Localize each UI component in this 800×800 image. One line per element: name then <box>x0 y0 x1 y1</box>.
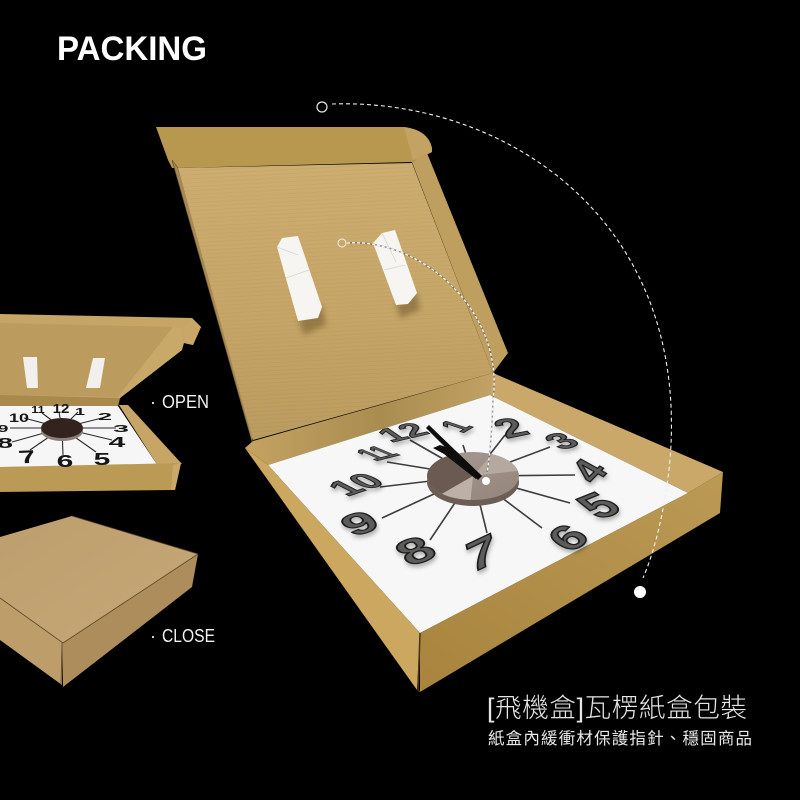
clock spokes <box>380 435 575 540</box>
box lid: inner panel <box>178 163 493 440</box>
small clock: 10 <box>9 412 29 425</box>
close label: CLOSE <box>162 626 215 646</box>
clock numerals: 3 <box>535 427 589 454</box>
clock numerals: 5 <box>565 485 633 526</box>
clock hub <box>427 452 519 506</box>
small lid <box>0 314 201 406</box>
box front wall <box>420 472 723 692</box>
clock <box>330 418 622 576</box>
white corrugated liner <box>268 395 688 633</box>
closed box edges <box>0 516 198 685</box>
clock numerals: 11 <box>348 443 408 464</box>
heading: corrugated box packaging: [飛機盒]瓦楞紙盒包裝 <box>487 693 747 723</box>
box left wall <box>245 448 420 690</box>
close label: · <box>150 626 156 646</box>
small clock: 4 <box>109 434 126 451</box>
small open-box view <box>0 314 201 492</box>
open box photo <box>156 127 723 692</box>
small foam blocks <box>23 357 105 388</box>
small clock: 2 <box>98 411 112 423</box>
closed box top <box>0 516 198 643</box>
small clock: 7 <box>17 447 38 468</box>
small clock: 1 <box>75 406 85 418</box>
closed box view <box>0 516 198 687</box>
small clock: 6 <box>57 452 73 471</box>
small clock: 12 <box>53 401 70 416</box>
clock numerals: 12 <box>370 419 437 447</box>
small clock: 11 <box>31 404 45 416</box>
dashed leader: foam to clock <box>338 239 494 485</box>
open label: OPEN <box>162 392 209 412</box>
box lid: top flap <box>156 127 432 168</box>
lid hinge strip <box>245 373 493 465</box>
box lid: right flap <box>412 153 508 373</box>
clock numerals: 9 <box>332 504 389 543</box>
clock hands <box>426 425 482 480</box>
clock numerals: 1 <box>431 416 482 436</box>
clock numerals: 8 <box>385 528 446 573</box>
small clock <box>0 401 129 471</box>
box lid: left flap <box>172 160 254 442</box>
closed box left wall <box>0 598 63 685</box>
clock numerals: 4 <box>562 452 618 490</box>
foam block: right <box>373 230 417 305</box>
clock numerals: 7 <box>462 524 501 583</box>
box corner edge <box>418 633 420 692</box>
small clock: 3 <box>113 423 129 434</box>
foam block shadows <box>298 292 420 335</box>
clock numerals: 10 <box>318 468 394 500</box>
clock numerals <box>318 411 633 583</box>
open label: · <box>150 392 156 412</box>
title: PACKING <box>57 30 207 68</box>
small box inside <box>0 395 182 492</box>
small clock: 5 <box>94 450 111 469</box>
dashed leader: box to top marker <box>317 102 671 598</box>
clock numerals: 2 <box>484 411 537 444</box>
subheading: inner cushioning note: 紙盒內緩衝材保護指針、穩固商品 <box>488 729 752 748</box>
foam block: left <box>277 236 322 321</box>
box back-right wall <box>490 373 723 493</box>
clock numerals: 6 <box>536 517 600 559</box>
closed box right wall <box>63 554 198 687</box>
